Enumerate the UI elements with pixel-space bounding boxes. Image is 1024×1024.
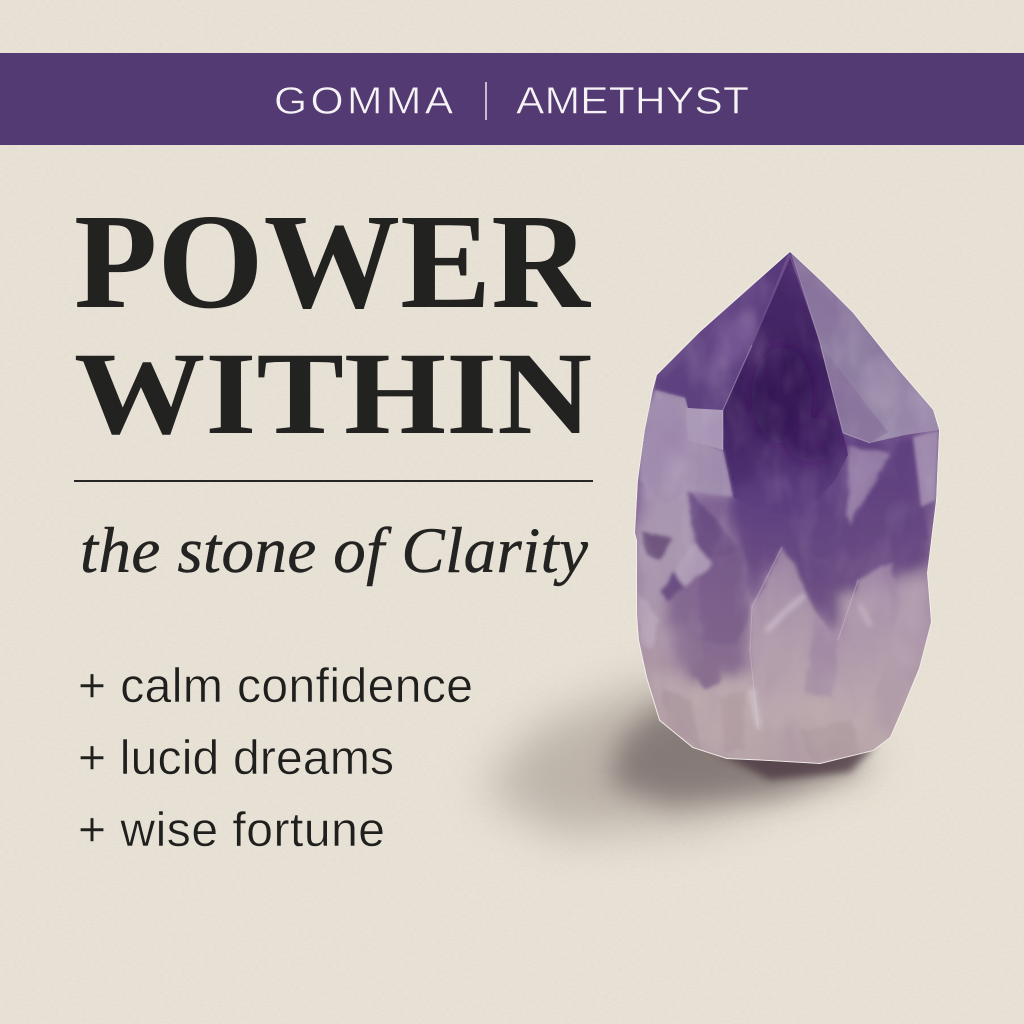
divider rule xyxy=(74,480,593,482)
soft crystal highlights xyxy=(752,595,870,725)
stone name: AMETHYST xyxy=(516,79,749,122)
right roof facet xyxy=(792,252,939,443)
subtitle: the stone of Clarity xyxy=(80,515,588,587)
title: WITHIN xyxy=(74,329,592,459)
header band xyxy=(0,53,1024,145)
soft body colour zones xyxy=(636,400,930,765)
dark core facet xyxy=(723,258,848,520)
brand name: GOMMA xyxy=(274,79,453,122)
benefits list xyxy=(78,660,473,857)
crystal shadow xyxy=(480,680,880,835)
amethyst crystal xyxy=(625,245,950,770)
left shoulder facets xyxy=(640,390,733,505)
rough facets xyxy=(636,437,927,762)
benefit: wise fortune: + wise fortune xyxy=(78,804,385,857)
facet edges xyxy=(723,254,870,730)
right shoulder facet xyxy=(913,430,939,507)
left roof facet xyxy=(655,254,788,410)
title xyxy=(74,187,592,459)
benefit: calm confidence: + calm confidence xyxy=(78,660,473,713)
mineral texture xyxy=(637,264,927,763)
title: POWER xyxy=(74,187,591,337)
benefit: lucid dreams: + lucid dreams xyxy=(78,732,394,785)
